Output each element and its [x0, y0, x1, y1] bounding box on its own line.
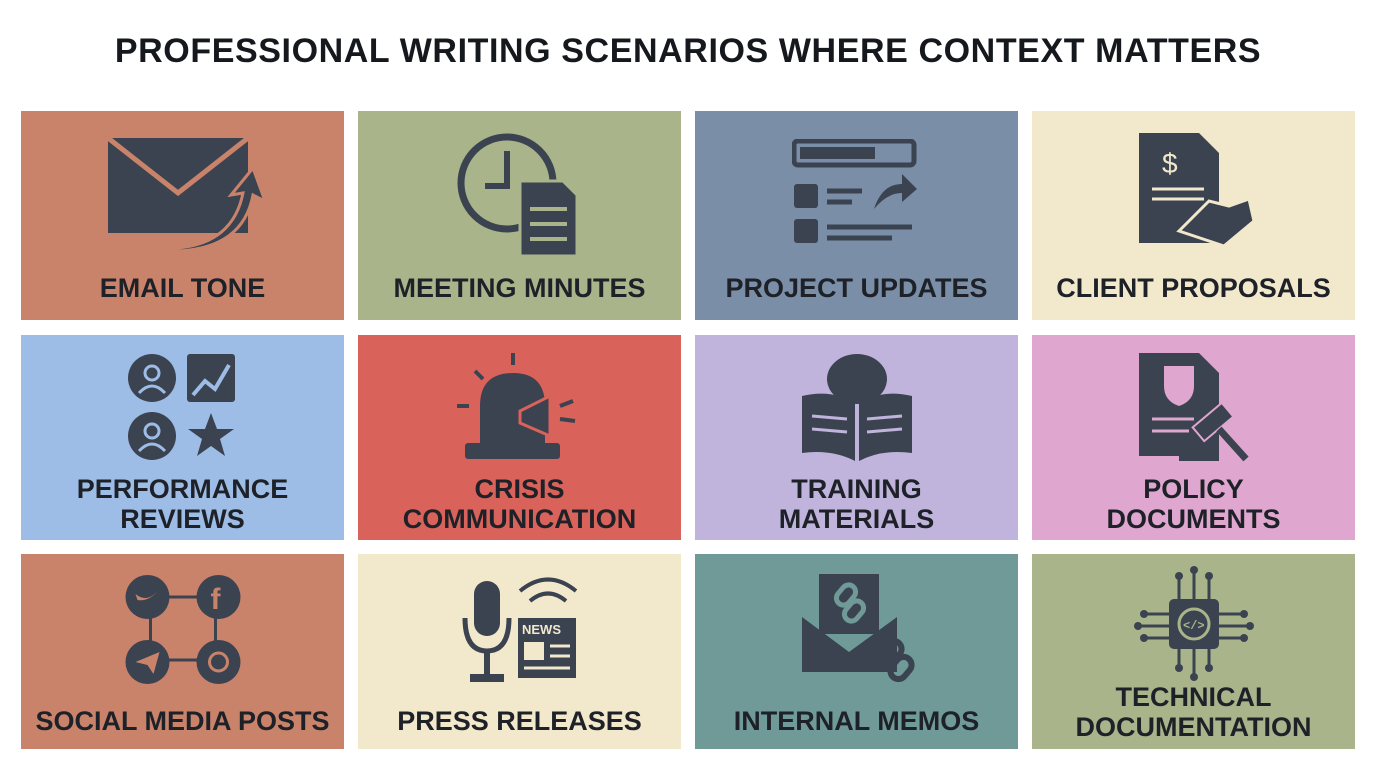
panel: meeting minutes: [358, 111, 681, 320]
icon: envelope: [108, 138, 262, 250]
label: CLIENT PROPOSALS: [1056, 273, 1331, 303]
icon: contract handshake: [1139, 133, 1254, 244]
icon: social network: f: [210, 583, 221, 616]
icon: microphone news: [462, 577, 578, 682]
label: SOCIAL MEDIA POSTS: [35, 706, 330, 736]
icon: contract handshake: $: [1162, 148, 1178, 179]
label: REVIEWS: [120, 504, 245, 534]
label: [779, 474, 934, 534]
panel: performance reviews: [21, 335, 344, 540]
label: EMAIL TONE: [100, 273, 265, 303]
label: PERFORMANCE: [77, 474, 288, 504]
icon: alarm megaphone: [457, 353, 576, 459]
label: POLICY: [1143, 474, 1244, 504]
icon: brain book: [802, 354, 912, 461]
label: PRESS RELEASES: [397, 706, 642, 736]
icon: envelope with links: [802, 574, 915, 682]
label: PROJECT UPDATES: [725, 273, 988, 303]
label: CRISIS: [474, 474, 565, 504]
icon: circuit chip code: </>: [1182, 619, 1204, 633]
icon: shield document gavel: [1139, 353, 1248, 462]
icon: progress checklist: [792, 139, 917, 243]
label: [1076, 682, 1311, 742]
panel: email tone: [21, 111, 344, 320]
panel: training materials: [695, 335, 1018, 540]
icon: clock and document: [458, 134, 576, 254]
icon: microphone news: NEWS: [522, 622, 561, 637]
panel: crisis communication: [358, 335, 681, 540]
panel: project updates: [695, 111, 1018, 320]
panel: client proposals: [1032, 111, 1355, 320]
icon: people, chart, star: [128, 354, 235, 460]
panel: social media posts: [21, 554, 344, 749]
label: TRAINING: [791, 474, 922, 504]
label: DOCUMENTS: [1106, 504, 1280, 534]
label: INTERNAL MEMOS: [734, 706, 979, 736]
icon: social network: [126, 575, 240, 684]
label: COMMUNICATION: [403, 504, 636, 534]
panel: press releases: [358, 554, 681, 749]
panel: policy documents: [1032, 335, 1355, 540]
panel: technical documentation: [1032, 554, 1355, 749]
label: MATERIALS: [779, 504, 934, 534]
label: [1106, 474, 1280, 534]
label: [77, 474, 288, 534]
label: TECHNICAL: [1116, 682, 1272, 712]
label: DOCUMENTATION: [1076, 712, 1311, 742]
panel: internal memos: [695, 554, 1018, 749]
label: [403, 474, 636, 534]
title: PROFESSIONAL WRITING SCENARIOS WHERE CONTEXT MATTERS: [115, 32, 1261, 70]
label: MEETING MINUTES: [393, 273, 646, 303]
icon: circuit chip code: [1134, 566, 1254, 681]
